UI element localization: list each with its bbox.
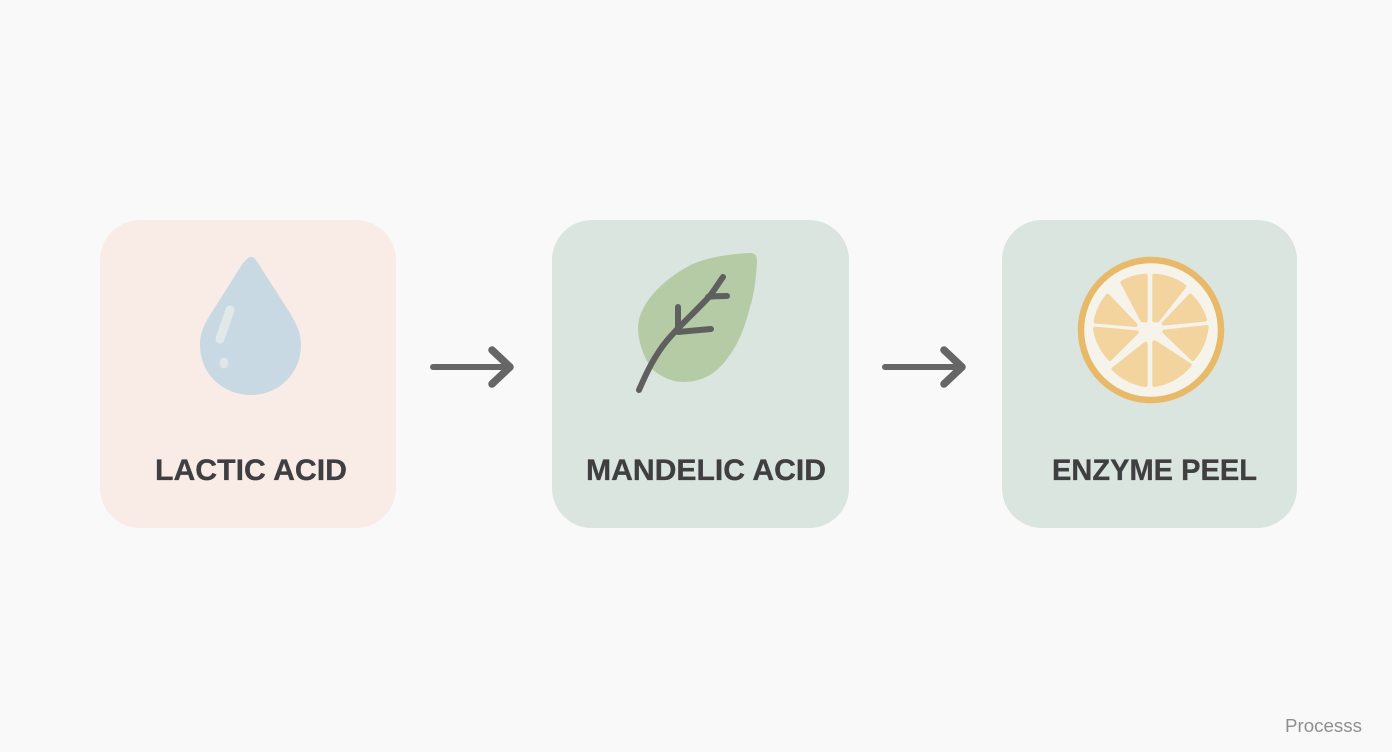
icon: water drop: [200, 257, 301, 395]
panel: lactic acid: [100, 220, 396, 528]
label: lactic acid: LACTIC ACID: [155, 454, 347, 487]
arrow: mandelic to enzyme: [885, 350, 962, 384]
card background: [100, 220, 396, 528]
label: enzyme peel: ENZYME PEEL: [1052, 454, 1257, 487]
icon: citrus slice: [1081, 260, 1221, 400]
arrow: lactic to mandelic: [433, 350, 510, 384]
label: mandelic acid: MANDELIC ACID: [586, 454, 826, 487]
caption: process: Processs: [1285, 716, 1362, 736]
panel: enzyme peel: [1002, 220, 1297, 528]
card background: [1002, 220, 1297, 528]
panel: mandelic acid: [552, 220, 849, 528]
icon: leaf: [638, 253, 757, 390]
card background: [552, 220, 849, 528]
